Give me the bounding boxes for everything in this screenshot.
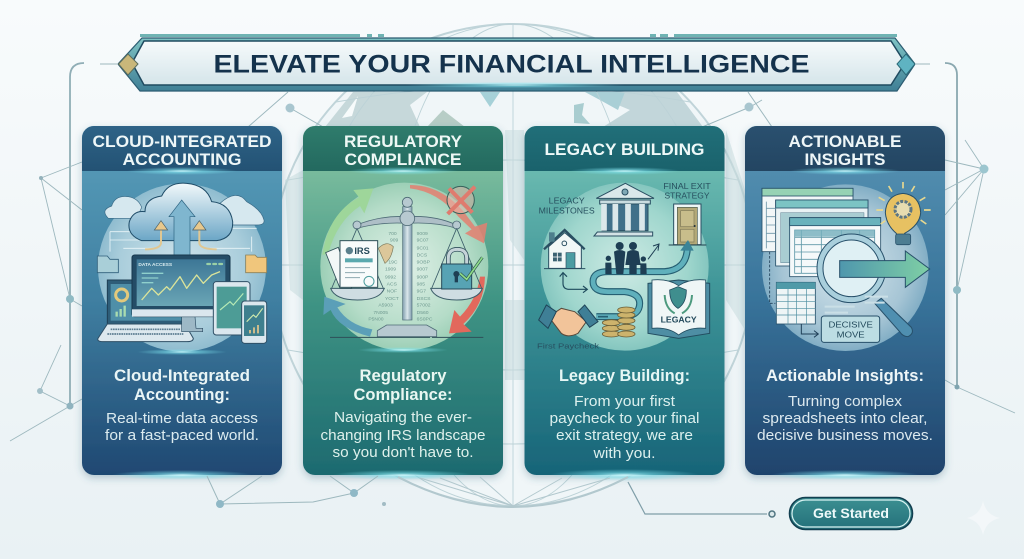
icon: folders (97, 256, 118, 273)
icon: magnifier lens (875, 298, 912, 337)
data columns: NOF (387, 289, 397, 295)
icon: open book (648, 280, 710, 338)
title text: ELEVATE YOUR FINANCIAL INTELLIGENCE (214, 52, 810, 78)
icon: sparkle (967, 501, 1000, 535)
card 3 body text: with you. (592, 445, 656, 462)
label: legacy milestones: LEGACY (549, 196, 585, 205)
data columns: 9009 (417, 231, 428, 237)
icon: coin stacks (602, 307, 635, 337)
icon: main cloud (129, 183, 233, 241)
icon: small table (776, 282, 815, 324)
card 4 illustration (762, 182, 931, 351)
get started button: Get Started (813, 506, 889, 521)
data columns: 909 (390, 238, 399, 244)
data columns: DCS (417, 253, 428, 259)
card 1 heading: CLOUD-INTEGRATED (92, 133, 272, 151)
card 2 mid glow (358, 347, 448, 353)
data columns (368, 231, 433, 323)
icon: bank building (594, 183, 654, 236)
globe backdrop (272, 24, 754, 506)
card 1 header glow (127, 167, 237, 175)
data columns: A5903 (378, 303, 393, 309)
data columns: 9C01 (417, 245, 429, 251)
network lines bottom (207, 476, 775, 517)
card 2 subheading: Compliance: (354, 386, 452, 404)
icon: decision arrow (840, 251, 930, 287)
data columns: 985 (417, 282, 425, 288)
label: final exit strategy: STRATEGY (664, 192, 710, 201)
card 4 subheading: Actionable Insights: (766, 367, 924, 385)
card 1 header (82, 126, 282, 171)
icon: tablet (213, 282, 250, 335)
icon: winding path (593, 248, 687, 317)
banner left gem (118, 54, 138, 75)
banner right gem (897, 54, 915, 75)
card 2 illustration (320, 183, 488, 351)
card 1 illustration: DATA ACCESS (138, 262, 173, 268)
card 1 illustration (97, 183, 267, 352)
icon: phone (242, 301, 267, 343)
data columns: 900P (417, 274, 429, 280)
network nodes beside banner (248, 92, 772, 130)
card 2 header glow (348, 167, 458, 175)
card 3 illustration: LEGACY (661, 315, 697, 324)
data columns: 9G7 (417, 289, 426, 295)
banner glow (405, 82, 625, 88)
data columns: YOCT (385, 296, 399, 302)
card 2 subheading: Regulatory (360, 367, 447, 385)
card 1 heading: ACCOUNTING (122, 151, 242, 169)
card 4 body text: spreadsheets into clear, (762, 410, 928, 427)
data columns: ACS (387, 282, 398, 288)
icon: cycle arrows (322, 188, 373, 255)
card 4 body text: Turning complex (788, 393, 903, 410)
card 1 body text: Real-time data access (106, 410, 258, 427)
decisive move label: MOVE (837, 329, 865, 339)
card 2 body text: Navigating the ever- (334, 409, 472, 426)
card 2 illustration: IRS (354, 246, 370, 256)
card 4 bottom glow (770, 470, 920, 480)
card 4 header glow (790, 167, 900, 175)
icon: handshake (549, 308, 586, 336)
card 4 header (745, 126, 945, 171)
card 1 bottom glow (112, 470, 252, 480)
panel: legacy building (524, 126, 724, 481)
data columns: 1909 (385, 267, 396, 273)
data columns: 19C (388, 259, 398, 265)
decisive move box (821, 316, 880, 342)
globe land masses above cards (325, 92, 703, 127)
data columns: 700 (388, 231, 397, 237)
icon: house (544, 230, 585, 249)
data columns: 7N005 (373, 310, 388, 316)
panel: actionable insights (745, 126, 945, 480)
card 2 body text: so you don't have to. (332, 444, 474, 461)
panel: cloud-integrated accounting (82, 126, 282, 480)
card 2 body text: changing IRS landscape (320, 427, 486, 444)
banner inner plate (132, 41, 905, 85)
card 2 header (303, 126, 503, 171)
icon: side clouds (105, 195, 264, 225)
banner frame (118, 38, 915, 91)
banner: title (100, 36, 930, 91)
icon: family (605, 242, 647, 274)
data columns: 57002 (417, 303, 431, 309)
card 1 subheading: Cloud-Integrated (114, 367, 250, 385)
icon: bulb with gear (885, 193, 921, 239)
icon: balance scale (403, 207, 412, 320)
card 1 subheading: Accounting: (134, 386, 230, 404)
icon: upload arrows (169, 200, 195, 257)
card 3 body text: From your first (574, 393, 676, 410)
label: first paycheck: First Paycheck (537, 342, 599, 351)
icon: red x circle (447, 186, 474, 214)
decisive move label: DECISIVE (828, 319, 873, 329)
data columns: 9C07 (417, 238, 429, 244)
icon: door (674, 204, 701, 245)
panel: regulatory compliance (303, 126, 503, 480)
card 3 heading: LEGACY BUILDING (544, 141, 704, 159)
data columns: D560 (417, 310, 429, 316)
card 3 header (524, 126, 724, 171)
network lines right (945, 63, 1015, 413)
data columns: DSCS (417, 296, 431, 302)
icon: desktop monitor (182, 317, 203, 332)
data columns: 6S0PC (417, 317, 433, 323)
banner top strips (140, 34, 897, 37)
card 2 bottom glow (333, 470, 473, 480)
data columns: 9992 (385, 274, 396, 280)
card 1 mid glow (137, 349, 227, 355)
label: legacy milestones: MILESTONES (539, 207, 595, 216)
card 2 heading: COMPLIANCE (344, 151, 462, 169)
card 3 bottom glow (550, 469, 700, 481)
data columns: 9007 (417, 267, 428, 273)
card 4 heading: INSIGHTS (804, 151, 886, 169)
card 3 header glow (570, 167, 680, 175)
network lines left (10, 63, 84, 441)
label: final exit strategy: FINAL EXIT (663, 182, 711, 191)
card 3 illustration (537, 182, 711, 351)
card 3 body text: paycheck to your final (550, 410, 700, 427)
data columns: S (390, 245, 394, 251)
card 2 heading: REGULATORY (344, 133, 462, 151)
icon: spreadsheet stack (762, 188, 881, 277)
icon: padlock (448, 249, 467, 267)
icon: IRS documents (326, 247, 352, 288)
card 4 body text: decisive business moves. (757, 427, 933, 444)
card 3 body text: exit strategy, we are (556, 427, 693, 444)
banner connector lines (100, 63, 930, 65)
card 1 body text: for a fast-paced world. (105, 427, 259, 444)
data columns: P5N00 (368, 317, 384, 323)
get started button (790, 498, 912, 530)
card 4 heading: ACTIONABLE (788, 133, 902, 151)
data columns: 9OBP (417, 259, 431, 265)
icon: laptop (107, 280, 185, 324)
card 3 subheading: Legacy Building: (559, 367, 690, 385)
